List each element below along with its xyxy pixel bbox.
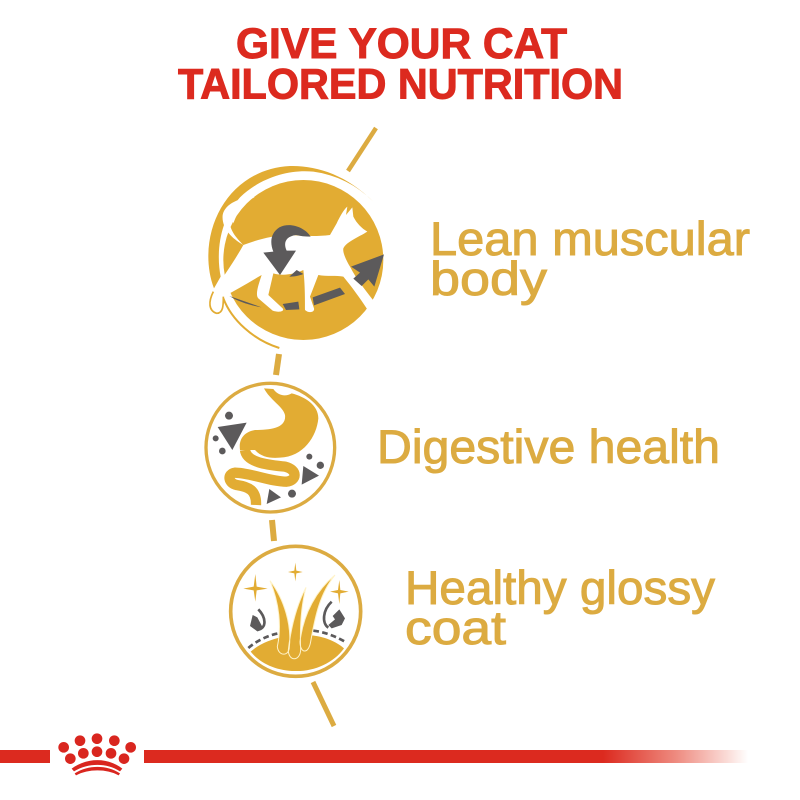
text: lean muscular body: body: [430, 252, 548, 305]
text: healthy glossy coat: [405, 561, 716, 654]
title: [178, 21, 623, 108]
dashes: [248, 631, 347, 648]
grey particles: [213, 412, 324, 504]
stomach and intestine: [230, 388, 318, 505]
title: TAILORED NUTRITION: [178, 62, 623, 108]
connector line: top: [348, 128, 376, 171]
arrow: upward grey arrow: [351, 254, 384, 287]
footer bar: right with fade: [144, 750, 748, 763]
text: lean muscular body: Lean muscular: [430, 212, 750, 265]
text: lean muscular body: [430, 212, 750, 305]
title: GIVE YOUR CAT: [236, 21, 567, 68]
arrow: curved grey arrow: [263, 225, 311, 275]
icon: digestive health: [206, 383, 335, 512]
grey arrows: [250, 602, 345, 631]
hair strands: [270, 575, 335, 659]
text: digestive health: Digestive health: [377, 420, 720, 473]
connector line: lower middle: [272, 520, 274, 541]
icon: lean muscular cat: [208, 166, 384, 348]
footer bar: left: [0, 750, 50, 763]
sparkles: [243, 563, 349, 604]
connector line: upper middle: [276, 354, 279, 375]
text: healthy glossy coat: Healthy glossy: [405, 561, 716, 614]
connector line: bottom: [313, 682, 334, 726]
skin: [251, 635, 344, 671]
logo: crown: [58, 733, 136, 775]
text: healthy glossy coat: coat: [405, 601, 506, 654]
icon: healthy glossy coat: [231, 546, 361, 676]
